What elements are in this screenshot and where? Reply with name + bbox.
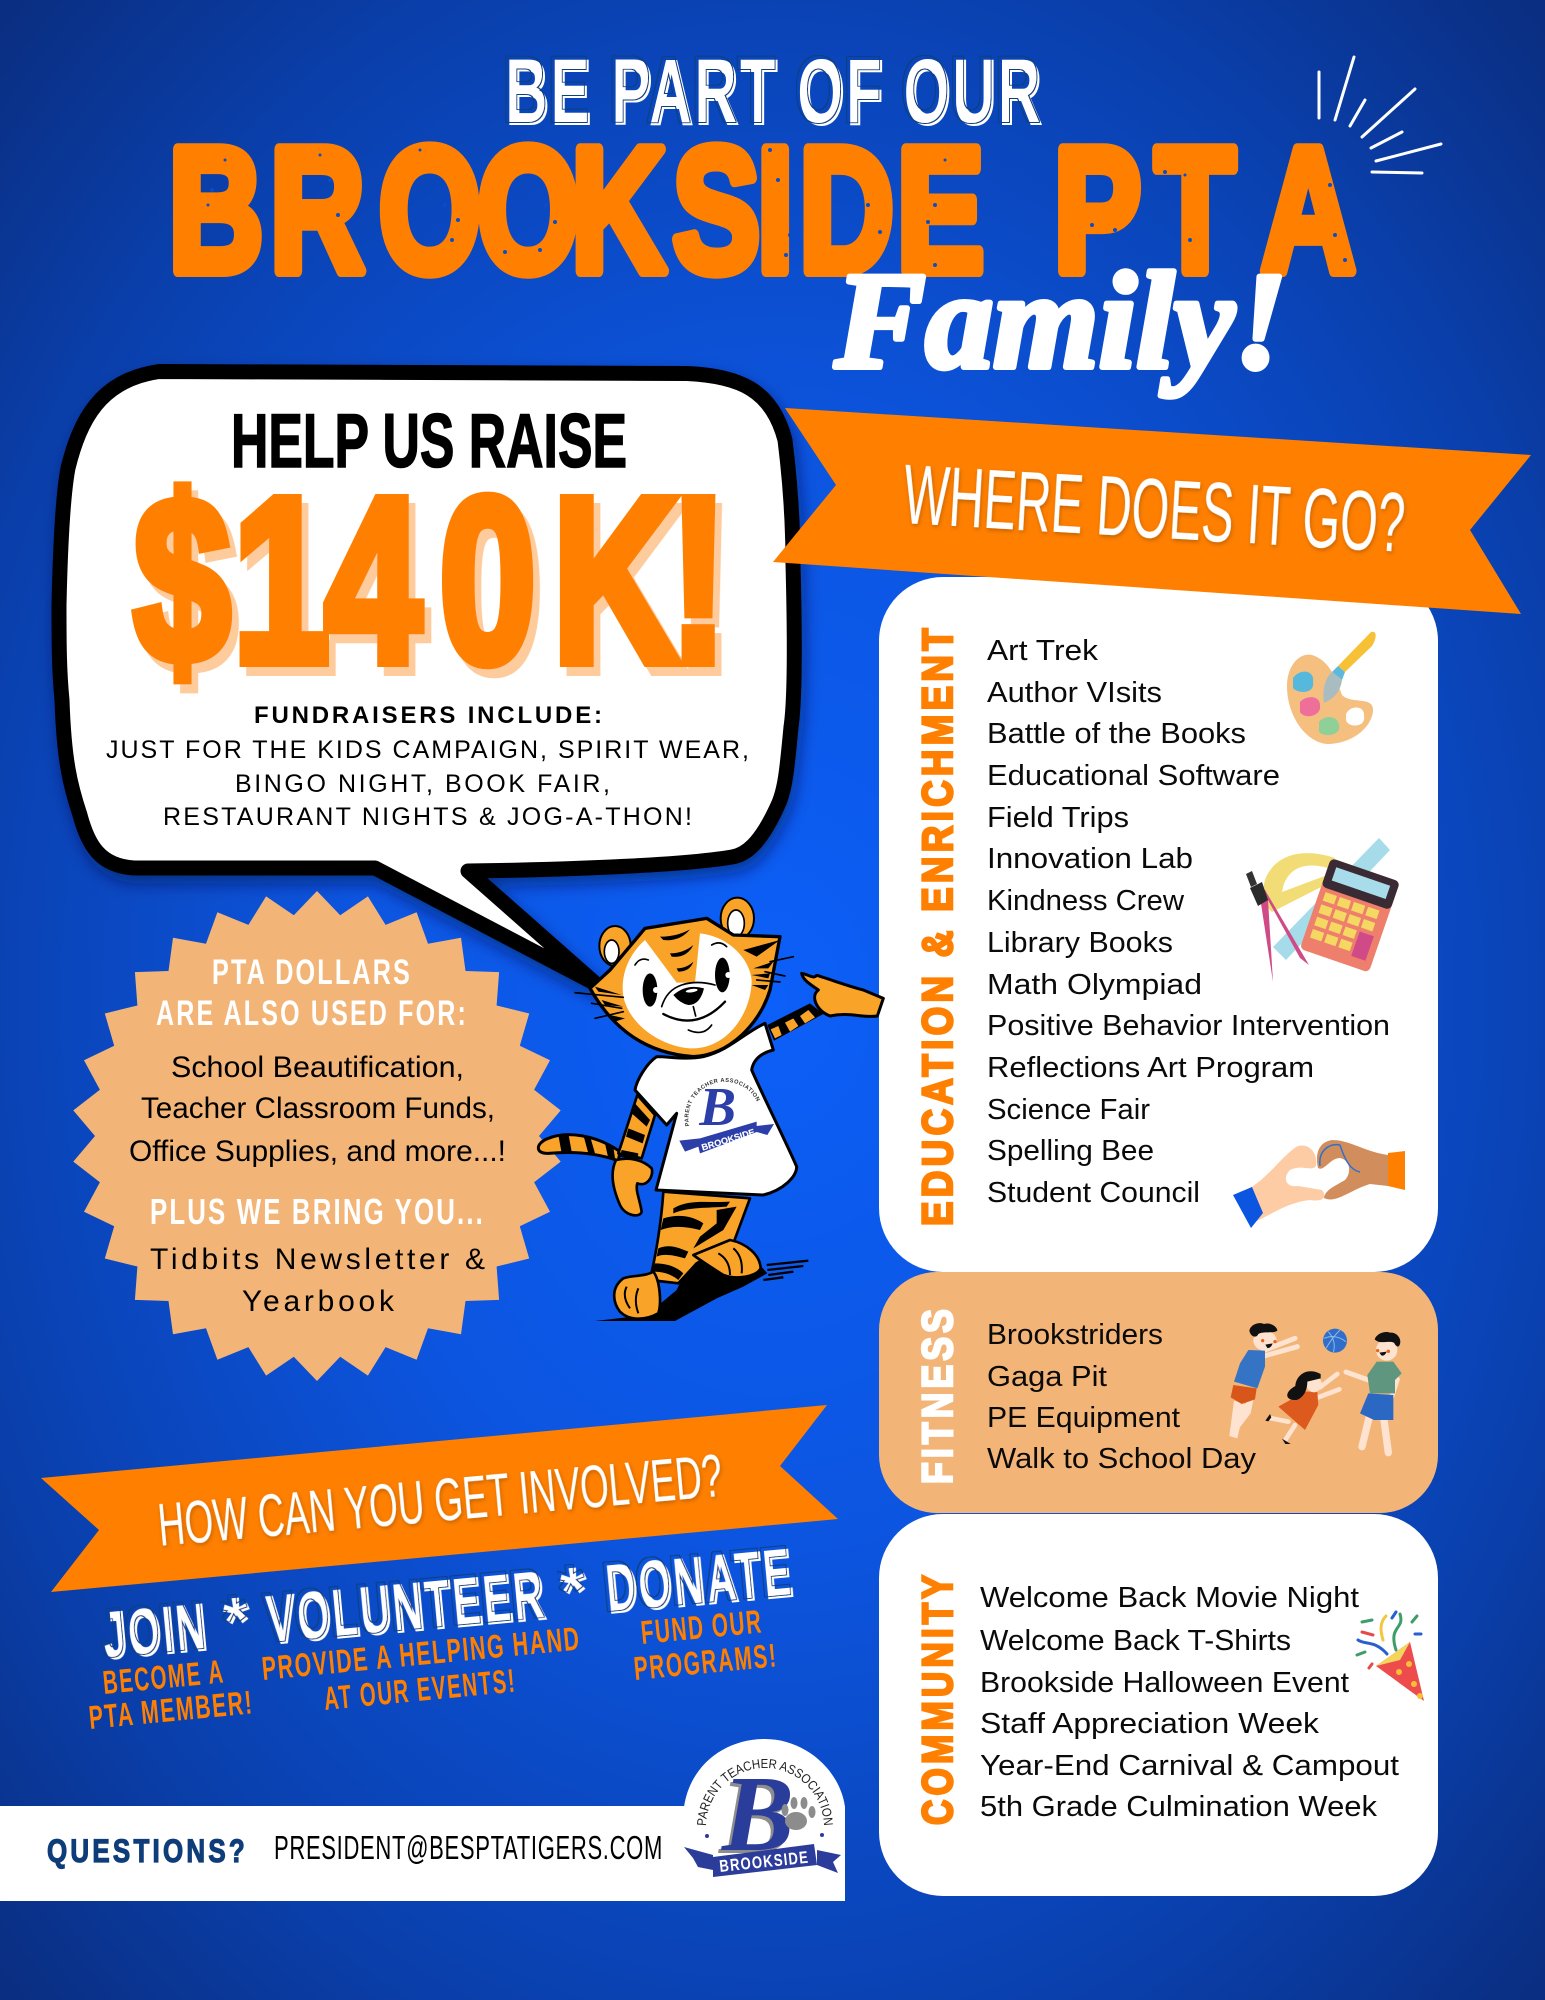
call to action words: DONATE: [603, 1535, 798, 1628]
face: [575, 929, 793, 1048]
logo dots: [705, 1833, 824, 1838]
text: questions: QUESTIONS?: [47, 1833, 248, 1869]
list: education items: Innovation Lab: [987, 843, 1193, 875]
list: community items: Staff Appreciation Week: [980, 1708, 1320, 1740]
list: education items: Math Olympiad: [987, 969, 1202, 1001]
list: community items: Brookside Halloween Event: [980, 1667, 1349, 1699]
big number: 140k: $140K!: [134, 450, 727, 711]
heading: fitness: FITNESS: [914, 1305, 962, 1484]
list: fitness items: [987, 1319, 1257, 1475]
badge text: uses: Teacher Classroom Funds,: [141, 1092, 495, 1125]
logo: brookside pta: [684, 1739, 845, 1877]
text: fundraisers include: BINGO NIGHT, BOOK FAIR,: [235, 770, 610, 798]
footer bar: [0, 1806, 845, 1901]
list: education items: Educational Software: [987, 760, 1280, 792]
list: education items: Positive Behavior Intervention: [987, 1010, 1390, 1042]
list: education items: Art Trek: [987, 635, 1099, 667]
list: community items: 5th Grade Culmination Week: [980, 1791, 1378, 1823]
list: fitness items: Gaga Pit: [987, 1361, 1107, 1393]
ribbon: BROOKSIDE: [718, 1848, 810, 1876]
text: provide a helping hand: [260, 1619, 582, 1717]
badge heading: pta dollars: [156, 953, 468, 1033]
badge text: newsletter and yearbook: Yearbook: [242, 1285, 395, 1318]
heading: help us raise: HELP US RAISE: [231, 399, 627, 484]
list: education items: Kindness Crew: [987, 885, 1185, 917]
list: education items: Science Fair: [987, 1094, 1150, 1126]
list: education items: Student Council: [987, 1177, 1200, 1209]
list: education items: Author VIsits: [987, 677, 1162, 709]
list: community items: Year-End Carnival & Campout: [980, 1750, 1399, 1782]
text: fundraisers include: JUST FOR THE KIDS CAMPAIGN, SPIRIT WEAR,: [106, 736, 749, 764]
tail: [538, 1133, 620, 1161]
call to action words: [100, 1535, 798, 1673]
text: provide a helping hand: AT OUR EVENTS!: [322, 1662, 518, 1717]
list: community items: Welcome Back T-Shirts: [980, 1625, 1291, 1657]
text: become a pta member: BECOME A: [101, 1652, 226, 1701]
boy left: [1229, 1323, 1297, 1438]
panel: speech bubble: [59, 372, 794, 984]
text: email: PRESIDENT@BESPTATIGERS.COM: [274, 1829, 663, 1866]
mascot: tiger in school shirt: [536, 896, 885, 1321]
badge text: newsletter and yearbook: [150, 1243, 485, 1318]
badge text: uses: Office Supplies, and more...!: [129, 1135, 506, 1168]
left arm: [618, 1095, 655, 1160]
icon: math tools and calculator: [1246, 838, 1400, 982]
title: brookside pta: BROOKSIDE PTA: [169, 111, 1356, 309]
list: education items: Library Books: [987, 927, 1173, 959]
banner text: how can you get involved: HOW CAN YOU GET INVOLVED?: [155, 1442, 725, 1559]
badge heading: pta dollars: ARE ALSO USED FOR:: [156, 994, 468, 1033]
text: fund our programs: FUND OUR: [639, 1602, 764, 1651]
badge text: newsletter and yearbook: Tidbits Newsletter &: [150, 1243, 485, 1276]
girl: [1265, 1371, 1339, 1444]
boy right: [1346, 1332, 1402, 1453]
badge text: uses: [129, 1051, 506, 1168]
list: fitness items: PE Equipment: [987, 1402, 1180, 1434]
shirt logo: [679, 1076, 774, 1154]
shirt: [635, 1023, 797, 1195]
list: education items: Spelling Bee: [987, 1135, 1154, 1167]
icon: paint palette: [1287, 632, 1376, 744]
text: provide a helping hand: PROVIDE A HELPING HAND: [260, 1619, 582, 1687]
shirt logo: BROOKSIDE: [700, 1127, 756, 1153]
legs: [614, 1192, 761, 1319]
list: community items: [980, 1582, 1399, 1823]
text: fund our programs: PROGRAMS!: [632, 1636, 779, 1687]
paw print: [782, 1797, 816, 1830]
text: become a pta member: [87, 1652, 255, 1736]
shirt logo: PARENT TEACHER ASSOCIATION: [684, 1078, 760, 1126]
call to action words: VOLUNTEER: [264, 1557, 550, 1659]
ball: [1323, 1329, 1347, 1353]
badge: pta dollars starburst: [73, 891, 561, 1381]
ground shadow: [595, 1261, 808, 1321]
icon: children playing ball: [1229, 1323, 1402, 1453]
text: fund our programs: [632, 1602, 779, 1687]
title: be part of our: BE PART OF OUR: [506, 42, 1044, 144]
call to action words: JOIN: [100, 1590, 212, 1673]
shirt logo: B: [698, 1076, 736, 1137]
call to action words: *: [220, 1582, 255, 1662]
icon: burst rays: [1319, 57, 1441, 173]
head: [590, 918, 780, 1057]
icon: party popper: [1357, 1612, 1424, 1701]
call to action words: *: [557, 1552, 592, 1632]
right arm: [767, 1003, 823, 1041]
logo letter b: B: [721, 1755, 794, 1874]
badge heading: pta dollars: PTA DOLLARS: [212, 953, 412, 992]
badge text: uses: School Beautification,: [171, 1051, 464, 1084]
panel: education and enrichment: [879, 577, 1438, 1272]
list: education items: Reflections Art Program: [987, 1052, 1314, 1084]
list: education items: Battle of the Books: [987, 718, 1246, 750]
ears: [599, 898, 754, 966]
banner: how can you get involved: [41, 1405, 838, 1592]
heading: community: COMMUNITY: [914, 1571, 962, 1825]
list: education items: Field Trips: [987, 802, 1129, 834]
left hand: [613, 1159, 652, 1215]
list: fitness items: Walk to School Day: [987, 1443, 1257, 1475]
icon: heart hands: [1233, 1140, 1405, 1228]
text: fundraisers include: [106, 702, 749, 831]
panel: fitness: [879, 1272, 1438, 1513]
list: education items: [987, 635, 1390, 1209]
list: community items: Welcome Back Movie Night: [980, 1582, 1359, 1614]
text: become a pta member: PTA MEMBER!: [87, 1683, 255, 1736]
right hand: [802, 973, 883, 1017]
title: family: Family!: [834, 244, 1287, 397]
panel: community: [879, 1514, 1438, 1896]
logo arc text: PARENT TEACHER ASSOCIATION: [697, 1759, 833, 1826]
text: fundraisers include: RESTAURANT NIGHTS & JOG-A-THON!: [163, 803, 692, 831]
list: fitness items: Brookstriders: [987, 1319, 1163, 1351]
text: fundraisers include: FUNDRAISERS INCLUDE:: [254, 702, 602, 729]
banner: where does it go: [773, 408, 1531, 614]
heading: education and enrichment: EDUCATION & ENRICHMENT: [914, 624, 962, 1226]
badge heading: plus we bring you: PLUS WE BRING YOU...: [150, 1191, 485, 1232]
